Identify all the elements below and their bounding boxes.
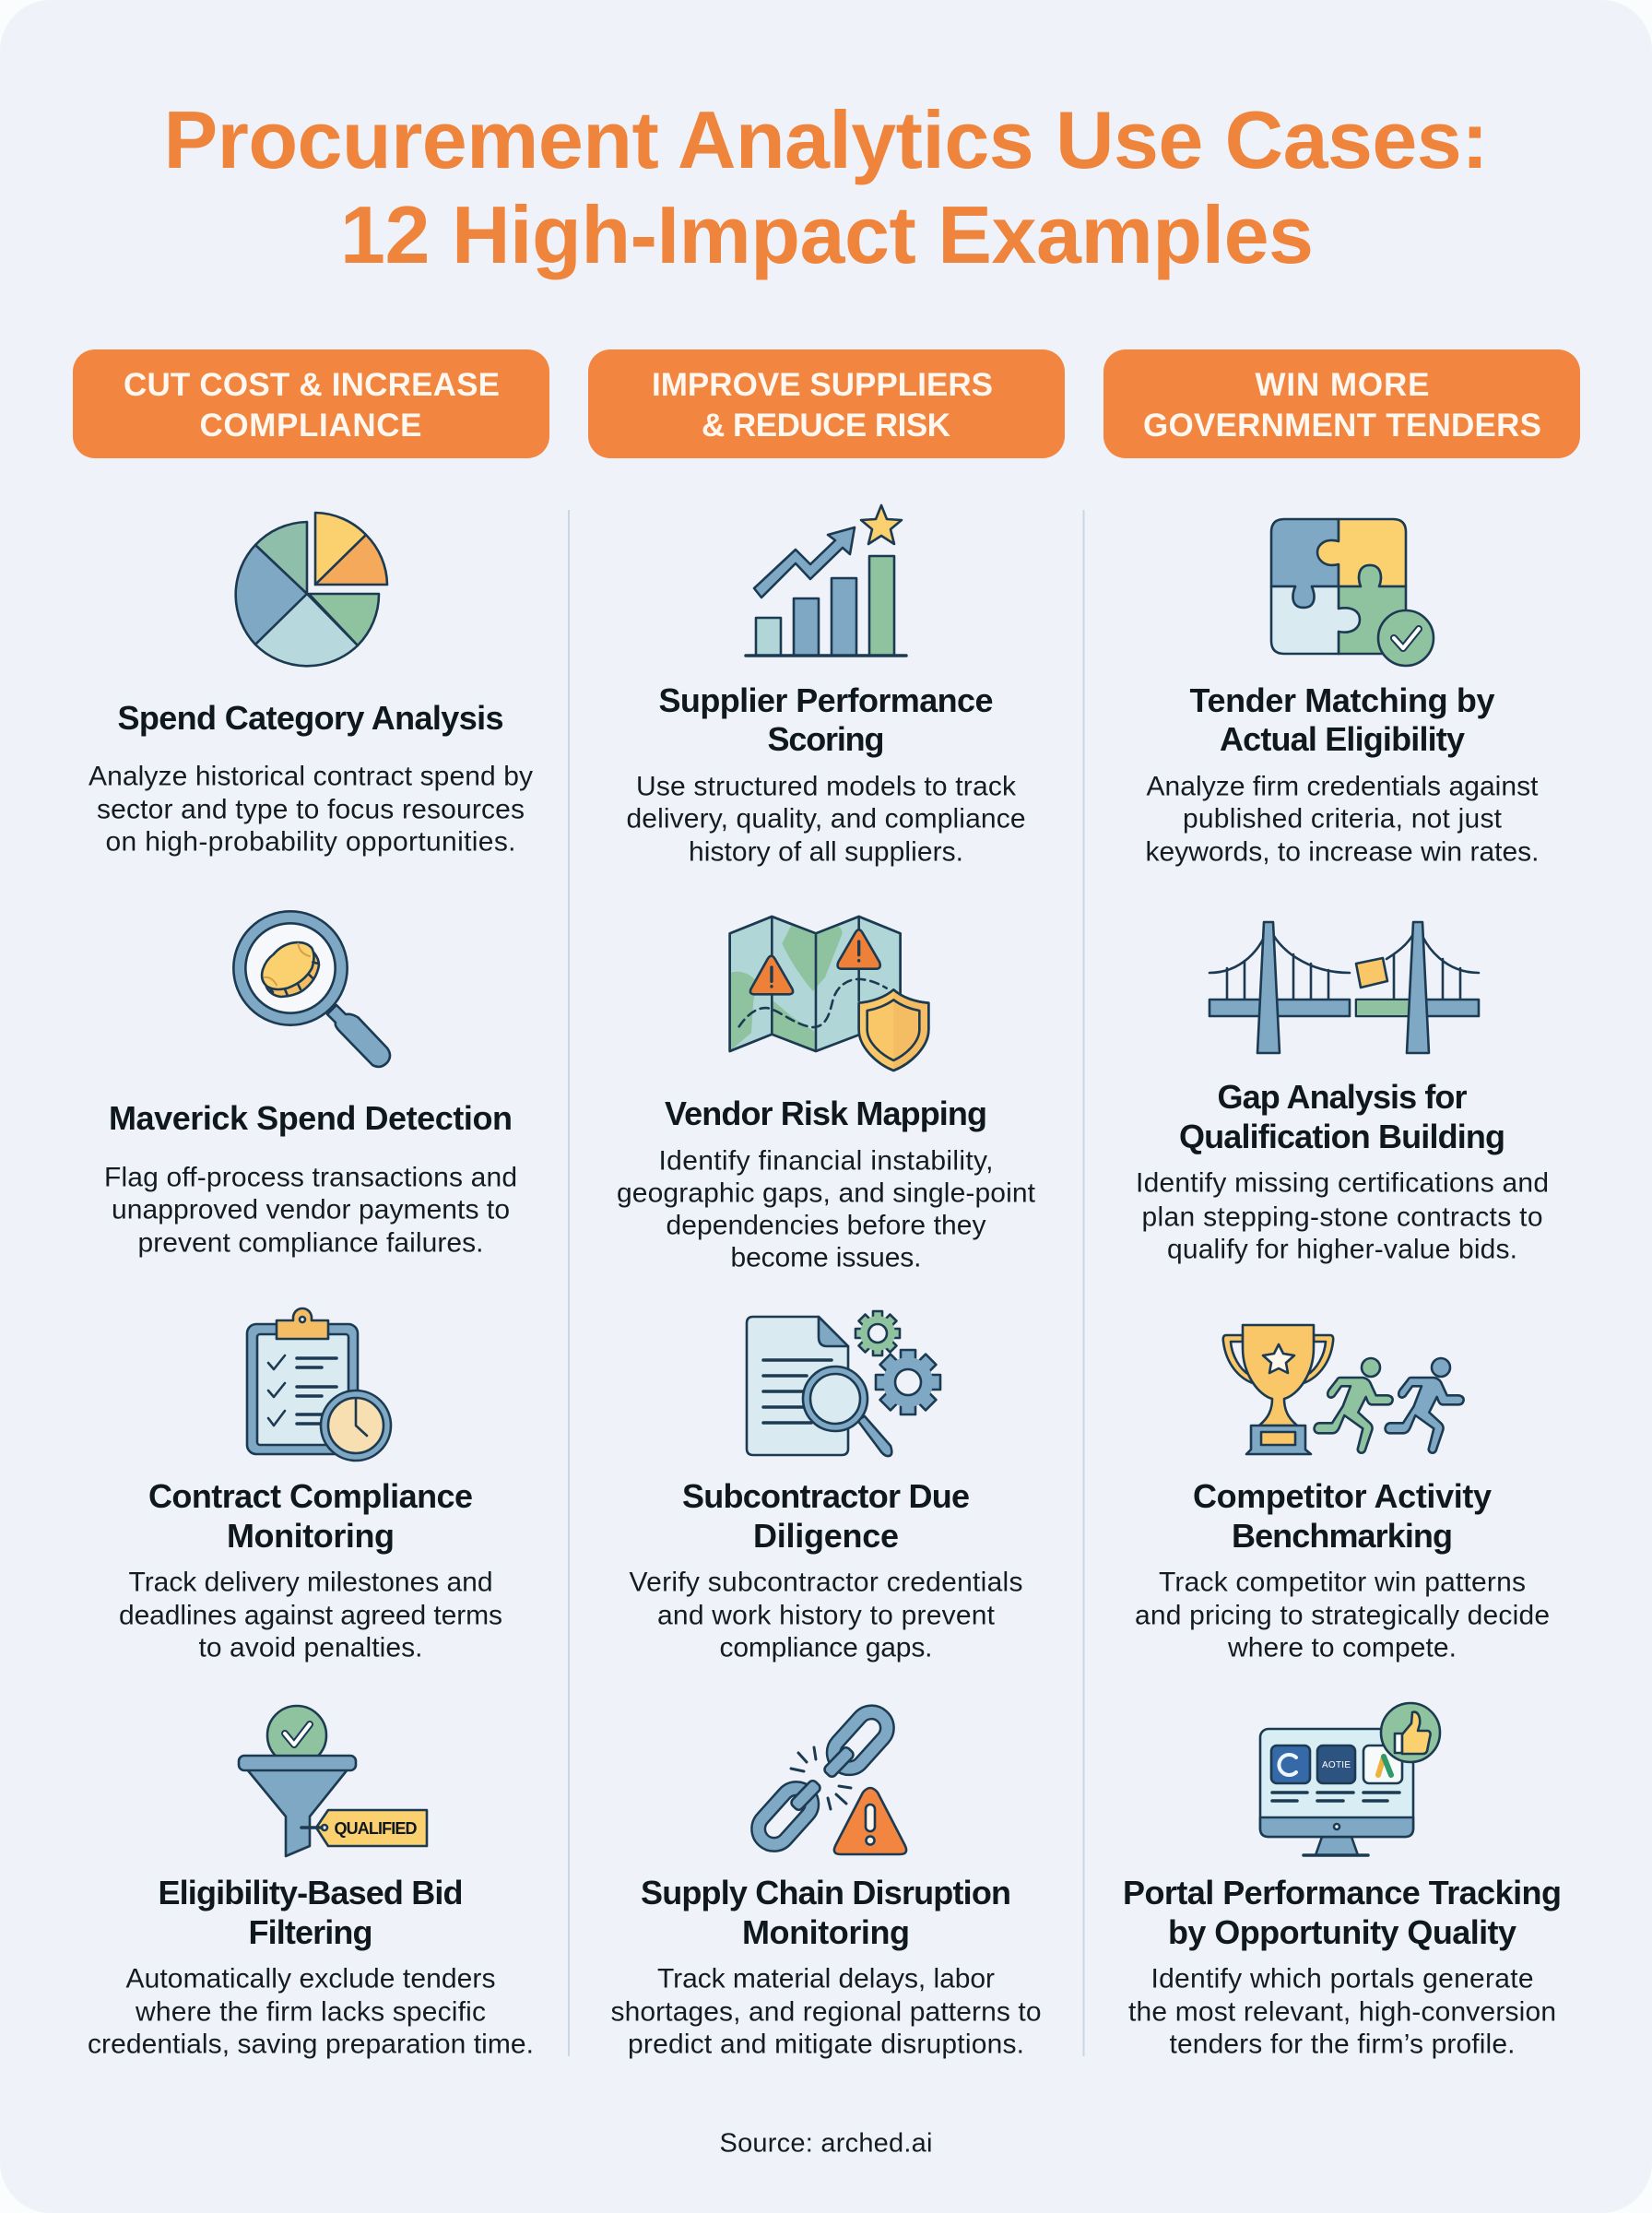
description [1145, 771, 1540, 867]
icon: document, magnifier, gears [747, 1311, 940, 1456]
heading: Actual Eligibility [1220, 720, 1465, 758]
description: Identify which portals generate [1150, 1964, 1534, 1994]
description [104, 1162, 517, 1258]
heading [682, 1477, 970, 1555]
heading: by Opportunity Quality [1168, 1913, 1516, 1951]
description: Analyze historical contract spend by [88, 762, 533, 791]
heading [658, 681, 994, 758]
category header: improve suppliers: IMPROVE SUPPLIERS [652, 367, 993, 403]
heading: Filtering [249, 1913, 372, 1951]
description: dependencies before they [666, 1210, 986, 1241]
icon: trophy and runners [1223, 1325, 1464, 1454]
description: predict and mitigate disruptions. [628, 2029, 1024, 2060]
description: plan stepping-stone contracts to [1141, 1202, 1543, 1232]
heading: Spend Category Analysis [118, 699, 503, 737]
heading: Gap Analysis for [1217, 1078, 1468, 1116]
description [88, 762, 533, 858]
heading: Portal Performance Tracking [1123, 1874, 1562, 1911]
description: credentials, saving preparation time. [88, 2029, 534, 2060]
heading [159, 1874, 463, 1951]
description: qualify for higher-value bids. [1167, 1234, 1517, 1265]
panel: Tender Matching by Actual Eligibility [1145, 519, 1540, 867]
description [119, 1568, 502, 1663]
description: sector and type to focus resources [97, 795, 525, 824]
heading [641, 1874, 1011, 1951]
icon: puzzle with check [1271, 519, 1434, 666]
heading [1123, 1874, 1562, 1951]
description [610, 1964, 1042, 2060]
heading: Subcontractor Due [682, 1477, 970, 1515]
icon: map with warnings and shield [730, 917, 928, 1071]
title: 12 High-Impact Examples [340, 189, 1314, 280]
heading: Supply Chain Disruption [641, 1874, 1011, 1911]
category header: improve suppliers: & REDUCE RISK [702, 408, 950, 444]
description: Identify financial instability, [658, 1145, 994, 1177]
description [1135, 1568, 1550, 1663]
description: compliance gaps. [719, 1632, 933, 1663]
heading: Diligence [753, 1517, 899, 1555]
panel: Contract Compliance Monitoring [119, 1308, 502, 1663]
panel: Spend Category Analysis [88, 513, 533, 858]
description: Verify subcontractor credentials [629, 1568, 1023, 1597]
category header: improve suppliers [588, 349, 1065, 458]
category header: cut cost: CUT COST & INCREASE [124, 367, 500, 403]
icon: funnel with qualified tag [239, 1706, 427, 1856]
description: delivery, quality, and compliance [627, 804, 1025, 834]
description: Track competitor win patterns [1159, 1568, 1526, 1597]
category header: win tenders: GOVERNMENT TENDERS [1143, 408, 1541, 444]
heading: Contract Compliance [148, 1477, 473, 1515]
tag label: QUALIFIED [334, 1819, 417, 1838]
description: where the firm lacks specific [135, 1997, 486, 2027]
heading [1193, 1477, 1492, 1555]
description: Use structured models to track [636, 771, 1017, 802]
description: Analyze firm credentials against [1147, 771, 1539, 802]
portal label: AOTIE [1322, 1760, 1351, 1770]
description: Flag off-process transactions and [104, 1162, 517, 1193]
description: history of all suppliers. [689, 837, 963, 867]
description: tenders for the firm’s profile. [1169, 2029, 1516, 2060]
description: prevent compliance failures. [138, 1228, 483, 1258]
heading: Monitoring [227, 1517, 395, 1555]
panel: Supplier Performance Scoring [627, 505, 1025, 867]
description: and pricing to strategically decide [1135, 1601, 1550, 1630]
description [88, 1964, 534, 2060]
category header: win tenders: WIN MORE [1256, 367, 1429, 403]
heading [148, 1477, 473, 1555]
title [164, 94, 1488, 280]
description: unapproved vendor payments to [112, 1195, 510, 1225]
heading: Eligibility-Based Bid [159, 1874, 463, 1911]
category header: cut cost [73, 349, 549, 458]
description [627, 771, 1025, 867]
heading: Vendor Risk Mapping [665, 1095, 987, 1132]
description: deadlines against agreed terms [119, 1601, 502, 1630]
heading: Supplier Performance [658, 681, 994, 719]
description: geographic gaps, and single-point [617, 1178, 1036, 1208]
description [1136, 1167, 1549, 1265]
icon: bar chart with star [746, 505, 906, 656]
heading: Benchmarking [1232, 1517, 1453, 1555]
panel: Vendor Risk Mapping [617, 917, 1036, 1272]
title: Procurement Analytics Use Cases: [164, 94, 1488, 185]
description: Identify missing certifications and [1136, 1167, 1549, 1199]
heading: Tender Matching by [1189, 681, 1495, 719]
heading [1189, 681, 1495, 758]
description [1128, 1964, 1556, 2060]
panel: Maverick Spend Detection [104, 911, 517, 1258]
category header: cut cost: COMPLIANCE [199, 408, 422, 444]
description: Automatically exclude tenders [125, 1964, 496, 1994]
heading: Competitor Activity [1193, 1477, 1492, 1515]
description: shortages, and regional patterns to [610, 1997, 1042, 2027]
panel: Competitor Activity Benchmarking [1135, 1325, 1550, 1663]
category header: win tenders [1103, 349, 1580, 458]
icon: magnifier with coin [233, 911, 390, 1067]
description: Track delivery milestones and [129, 1568, 492, 1597]
panel: Eligibility-Based Bid Filtering [88, 1706, 534, 2060]
description [629, 1568, 1023, 1663]
icon: broken chain with warning [752, 1706, 906, 1854]
panel: Subcontractor Due Diligence [629, 1311, 1023, 1663]
description: on high-probability opportunities. [105, 826, 516, 858]
description [617, 1145, 1036, 1272]
icon: monitor with portals and thumb [1260, 1703, 1440, 1855]
heading: Maverick Spend Detection [109, 1099, 513, 1137]
panel: Portal Performance Tracking by Opportunity Quality [1123, 1703, 1562, 2060]
panel: Gap Analysis for Qualification Building [1136, 922, 1549, 1265]
heading: Qualification Building [1179, 1118, 1505, 1155]
description: published criteria, not just [1183, 804, 1503, 834]
description: to avoid penalties. [199, 1632, 422, 1663]
description: and work history to prevent [657, 1601, 996, 1630]
description: become issues. [730, 1243, 922, 1272]
source note: Source: arched.ai [719, 2128, 933, 2158]
heading [1179, 1078, 1505, 1155]
description: the most relevant, high-conversion [1128, 1997, 1556, 2027]
description: where to compete. [1227, 1632, 1457, 1663]
heading: Scoring [767, 720, 885, 758]
icon: clipboard with clock [247, 1308, 391, 1461]
icon: pie chart [236, 513, 387, 666]
description: Track material delays, labor [657, 1964, 995, 1994]
description: keywords, to increase win rates. [1145, 837, 1540, 867]
icon: bridge with gap [1210, 922, 1479, 1053]
panel: Supply Chain Disruption Monitoring [610, 1706, 1042, 2060]
heading: Monitoring [742, 1913, 910, 1951]
